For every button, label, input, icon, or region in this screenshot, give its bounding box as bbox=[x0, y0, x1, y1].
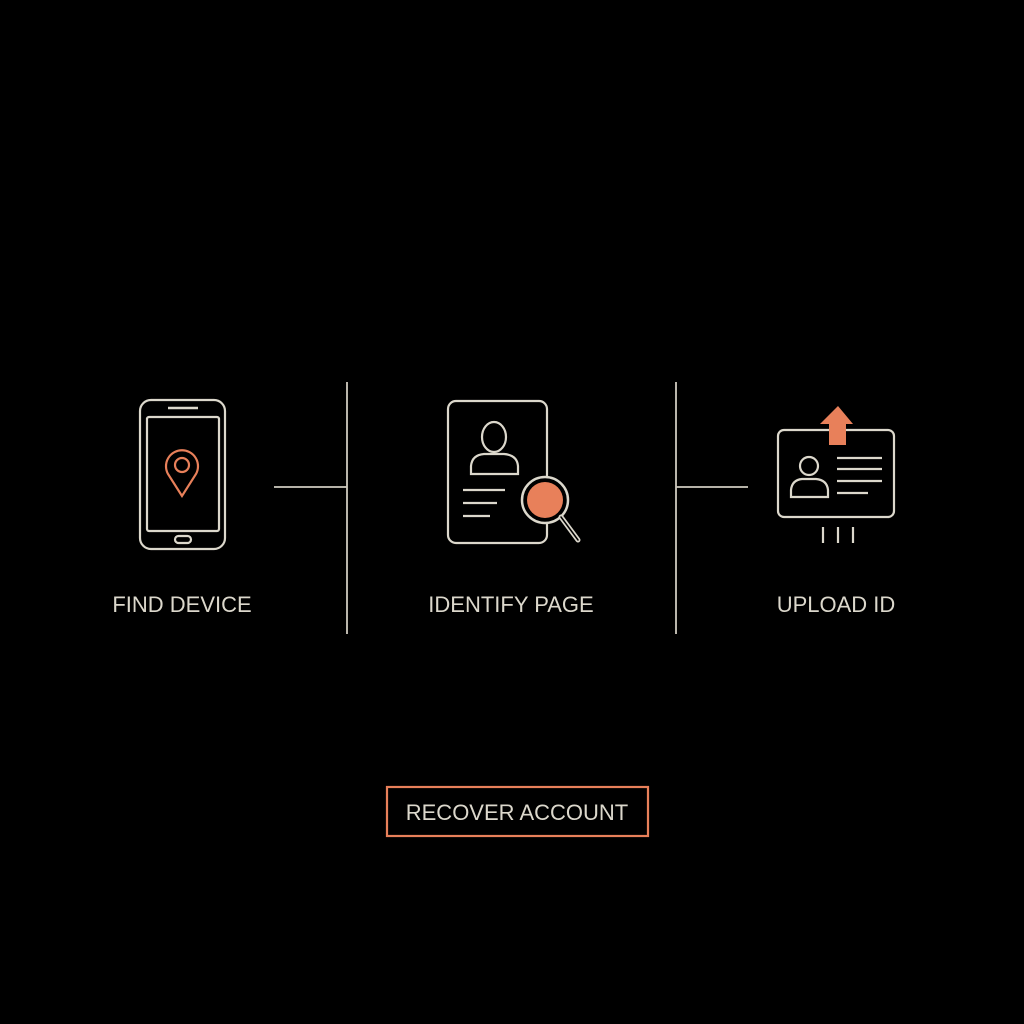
icon: upload arrow bbox=[820, 406, 853, 445]
icon: location pin bbox=[166, 450, 198, 496]
button: recover account bbox=[387, 787, 648, 836]
icon: document with magnifier bbox=[448, 401, 578, 543]
button: recover account: RECOVER ACCOUNT bbox=[406, 800, 628, 825]
label: identify page: IDENTIFY PAGE bbox=[428, 592, 594, 617]
icon: ID card upload bbox=[778, 406, 894, 543]
icon: phone with location pin bbox=[140, 400, 225, 549]
label: find device: FIND DEVICE bbox=[112, 592, 252, 617]
icon: magnifier bbox=[522, 477, 578, 540]
label: upload id: UPLOAD ID bbox=[777, 592, 895, 617]
connector line 2 bbox=[676, 382, 748, 634]
connector line 1 bbox=[274, 382, 347, 634]
